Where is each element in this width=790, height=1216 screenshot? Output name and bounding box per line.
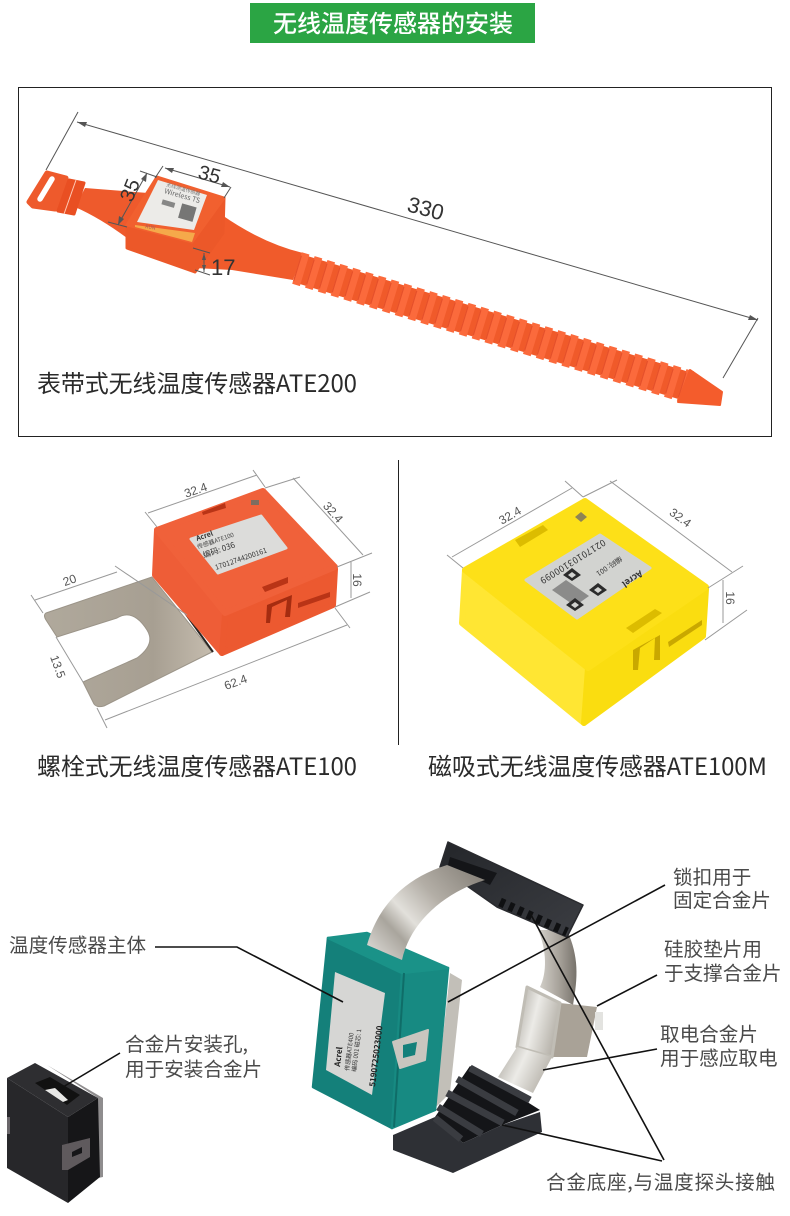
caption: ATE100: 螺栓式无线温度传感器ATE100 (37, 747, 357, 782)
callout labels: 温度传感器主体 (9, 929, 147, 958)
yellow sensor body: 编码: 001 (594, 554, 624, 578)
sensor body on strap: Wireless TS (163, 186, 201, 206)
sensor body on strap (127, 177, 224, 272)
black top lock (440, 842, 583, 937)
dimension lines and values: 330 (405, 192, 447, 225)
dimensions: 32.4 (320, 499, 346, 526)
dimensions: 20 (61, 571, 79, 589)
yellow sensor body (462, 501, 706, 723)
right metal band (538, 930, 577, 1005)
callout labels: 固定合金片 (673, 884, 771, 913)
icon: QR code (552, 568, 607, 611)
callout labels: 于支撑合金片 (664, 957, 782, 986)
panel: strap sensor ATE200 (18, 88, 772, 436)
dimensions: 16 (350, 573, 364, 587)
orange sensor body: Acrel (194, 528, 215, 544)
dimension lines and values: 35 (116, 176, 145, 205)
dimensions (447, 480, 747, 640)
green sensor body: 编码 001 磁芯: 1 (349, 1028, 363, 1072)
dimensions (31, 470, 372, 728)
metal band over module (367, 865, 485, 960)
callout labels: 用于安装合金片 (125, 1053, 262, 1082)
green sensor body: 5190725023000 (367, 1025, 385, 1087)
dimensions: 13.5 (47, 653, 68, 680)
panel: installed sensor with callouts (7, 842, 782, 1203)
callout labels: 合金底座,与温度探头接触 (546, 1166, 775, 1195)
orange sensor body: 17012744200161 (214, 546, 269, 573)
title banner: 无线温度传感器的安装 (273, 4, 513, 39)
leader lines (58, 885, 665, 1161)
icon: QR code (178, 203, 197, 222)
metal clamp (435, 973, 603, 1108)
green sensor body: Acrel (332, 1046, 345, 1068)
orange sensor body (155, 491, 335, 653)
sensor body on strap: RUN (145, 223, 156, 232)
sensor body on strap: 无线测温传感器 (165, 181, 201, 198)
orange sensor body: 编码: 036 (201, 539, 237, 561)
callout labels: 取电合金片 (660, 1018, 758, 1047)
dimension lines and values (46, 112, 758, 378)
callout labels: 合金片安装孔, (125, 1028, 248, 1057)
green sensor body: 传感器ATE400 (342, 1031, 356, 1071)
dimensions: 62.4 (222, 672, 249, 693)
panel: magnetic sensor ATE100M (428, 480, 767, 782)
callout labels: 锁扣用于 (673, 861, 751, 890)
dimension lines and values: 17 (211, 255, 235, 280)
black alloy base (393, 1066, 542, 1173)
dimension lines and values: 35 (196, 162, 223, 189)
panel: bolt sensor ATE100 (31, 470, 372, 782)
callout labels: 硅胶垫片用 (664, 933, 762, 962)
caption: ATE100M: 磁吸式无线温度传感器ATE100M (428, 747, 767, 782)
callout labels: 用于感应取电 (660, 1042, 778, 1071)
callout labels (9, 861, 782, 1195)
caption: ATE200: 表带式无线温度传感器ATE200 (37, 364, 357, 399)
strap body (29, 173, 722, 405)
black sensor detail (7, 1063, 103, 1203)
orange sensor body: 传感器ATE100 (196, 530, 236, 551)
dimensions: 16 (723, 591, 737, 605)
green sensor body (313, 933, 448, 1128)
divider between products (398, 460, 400, 745)
dimensions: 32.4 (667, 505, 694, 530)
yellow sensor body: Acrel (620, 567, 646, 591)
dimensions: 32.4 (182, 480, 209, 501)
yellow sensor body: 02170103100099 (538, 536, 608, 587)
metal plate (44, 577, 212, 707)
dimensions: 32.4 (496, 503, 524, 527)
